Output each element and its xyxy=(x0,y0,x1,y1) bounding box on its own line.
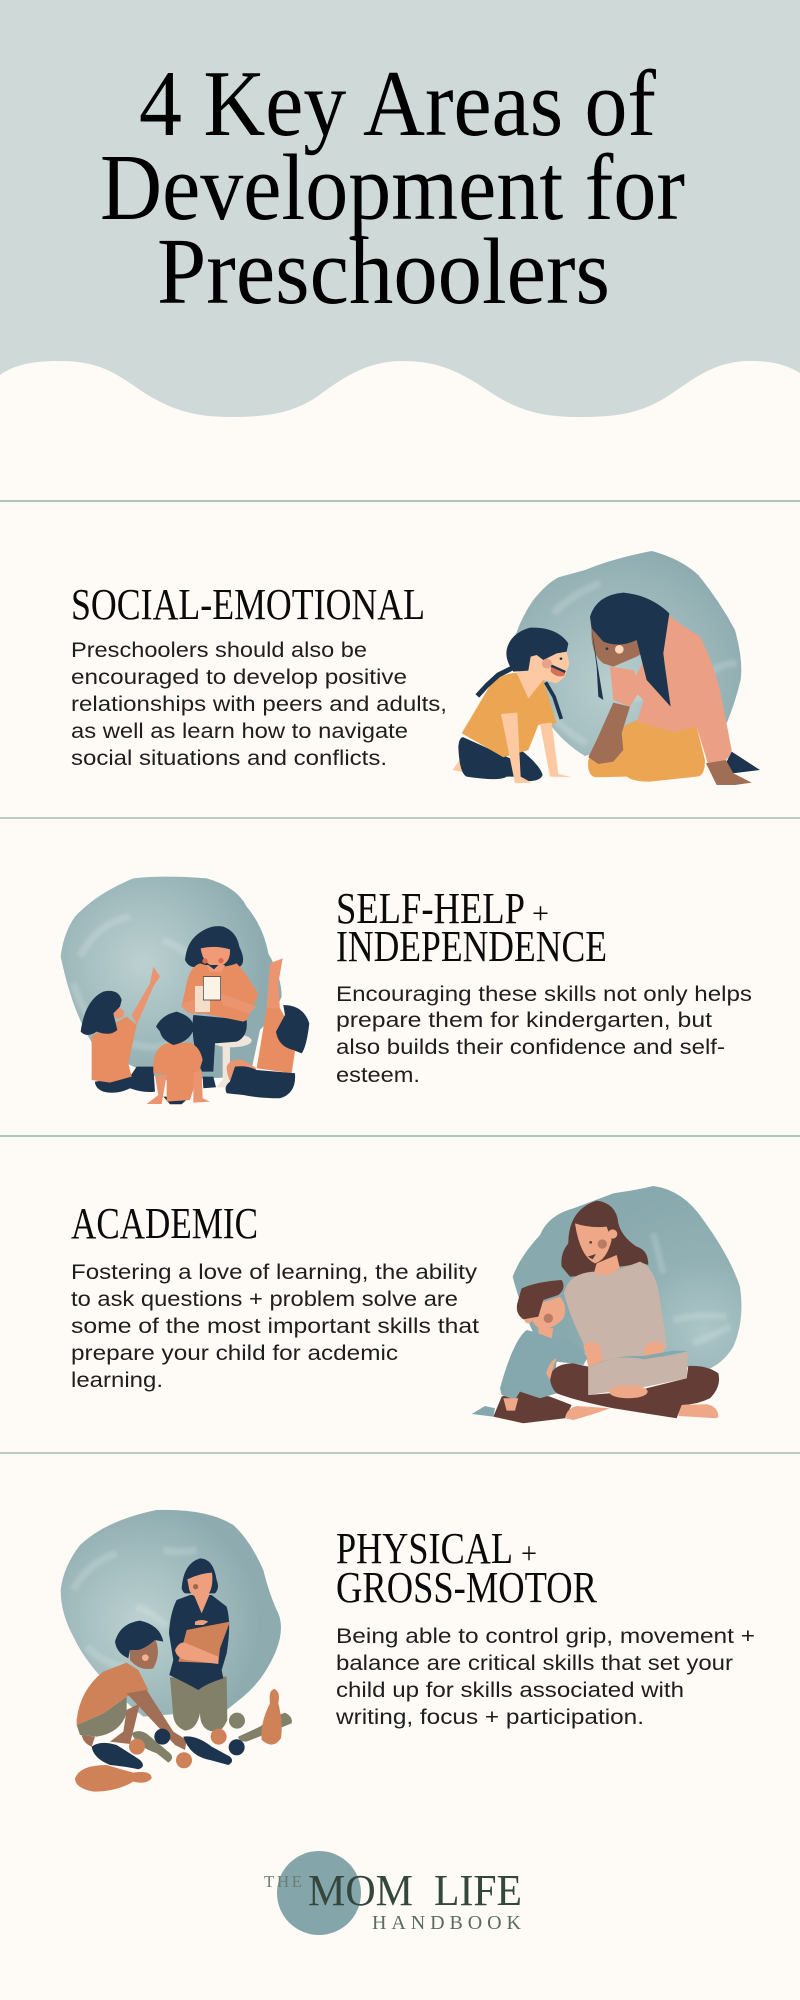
logo: the mom life handbook xyxy=(264,1851,522,1935)
body text: self-help: esteem. xyxy=(336,1064,420,1087)
heading: self-help and independence: INDEPENDENCE xyxy=(336,922,607,971)
body text: physical: writing, focus + participation. xyxy=(335,1706,644,1729)
blob backdrop xyxy=(515,551,741,756)
title xyxy=(100,52,685,324)
heading: self-help and independence xyxy=(336,884,607,971)
body text: academic: some of the most important skills that xyxy=(71,1315,479,1338)
mother's legs and feet xyxy=(546,1358,719,1420)
body text: academic: Fostering a love of learning, the ability xyxy=(71,1261,478,1284)
body text: social-emotional: relationships with peers and adults, xyxy=(71,693,447,716)
heading: academic: ACADEMIC xyxy=(71,1199,258,1248)
heading: self-help and independence: SELF-HELP xyxy=(336,884,525,933)
figure: right child raising hand xyxy=(226,958,309,1098)
body text: physical: Being able to control grip, movement + xyxy=(336,1625,755,1648)
figure: boy xyxy=(472,1280,587,1423)
body text: social-emotional: Preschoolers should also be xyxy=(71,639,367,662)
body text: academic: learning. xyxy=(71,1369,163,1392)
panel: self-help and independence xyxy=(61,877,752,1104)
logo: the mom life handbook: HANDBOOK xyxy=(372,1912,522,1934)
figure: middle child from behind xyxy=(147,1012,210,1104)
figure: left child raising hand xyxy=(81,967,160,1093)
panel: physical and gross-motor xyxy=(61,1510,755,1792)
blob backdrop xyxy=(61,1510,281,1717)
figure: teacher on stool xyxy=(182,926,258,1088)
bowling pins and balls xyxy=(75,1689,292,1792)
title: 4 Key Areas of xyxy=(139,52,657,156)
body text: academic xyxy=(71,1261,479,1392)
header banner with wavy edge xyxy=(0,0,800,417)
title: Preschoolers xyxy=(157,220,610,324)
illustration: teacher observing child with bowling pins xyxy=(61,1510,292,1792)
panel: academic xyxy=(71,1186,741,1423)
body text: self-help: also builds their confidence and self- xyxy=(336,1036,725,1059)
blob backdrop xyxy=(61,877,282,1080)
open book xyxy=(588,1351,688,1398)
body text: self-help: prepare them for kindergarten, but xyxy=(336,1009,712,1032)
heading: self-help and independence: + xyxy=(532,897,549,930)
figure: mother xyxy=(561,1201,667,1367)
logo: the mom life handbook: LIFE xyxy=(434,1866,522,1915)
body text: physical: child up for skills associated with xyxy=(336,1679,684,1702)
heading: physical and gross-motor: + xyxy=(521,1537,537,1570)
body text: academic: prepare your child for acdemic xyxy=(71,1342,398,1365)
body text: social-emotional: encouraged to develop positive xyxy=(71,666,407,689)
panel: social-emotional xyxy=(71,551,760,785)
illustration: mother and daughter face to face xyxy=(453,551,760,785)
body text: social-emotional: social situations and conflicts. xyxy=(71,747,387,770)
logo: the mom life handbook: THE xyxy=(264,1872,302,1891)
body text: self-help xyxy=(336,983,752,1087)
blob backdrop xyxy=(513,1186,741,1370)
body text: self-help: Encouraging these skills not only helps xyxy=(336,983,752,1006)
body text: academic: to ask questions + problem solve are xyxy=(71,1288,458,1311)
figure: woman with clipboard xyxy=(169,1558,230,1732)
logo: the mom life handbook: MOM xyxy=(308,1866,413,1915)
figure: mother xyxy=(588,593,760,785)
illustration: teacher showing cards to children xyxy=(61,877,309,1104)
figure: crouching boy xyxy=(77,1621,187,1750)
heading: physical and gross-motor: GROSS-MOTOR xyxy=(336,1563,598,1612)
heading: social-emotional: SOCIAL-EMOTIONAL xyxy=(71,580,425,629)
heading: physical and gross-motor xyxy=(336,1524,598,1612)
body text: physical xyxy=(335,1625,755,1729)
body text: social-emotional xyxy=(71,639,447,770)
illustration: mother reading to son xyxy=(472,1186,741,1423)
heading: physical and gross-motor: PHYSICAL xyxy=(336,1524,513,1573)
body text: physical: balance are critical skills that set your xyxy=(336,1652,733,1675)
body text: social-emotional: as well as learn how to navigate xyxy=(71,720,408,743)
figure: girl xyxy=(453,628,572,783)
title: Development for xyxy=(100,136,685,240)
